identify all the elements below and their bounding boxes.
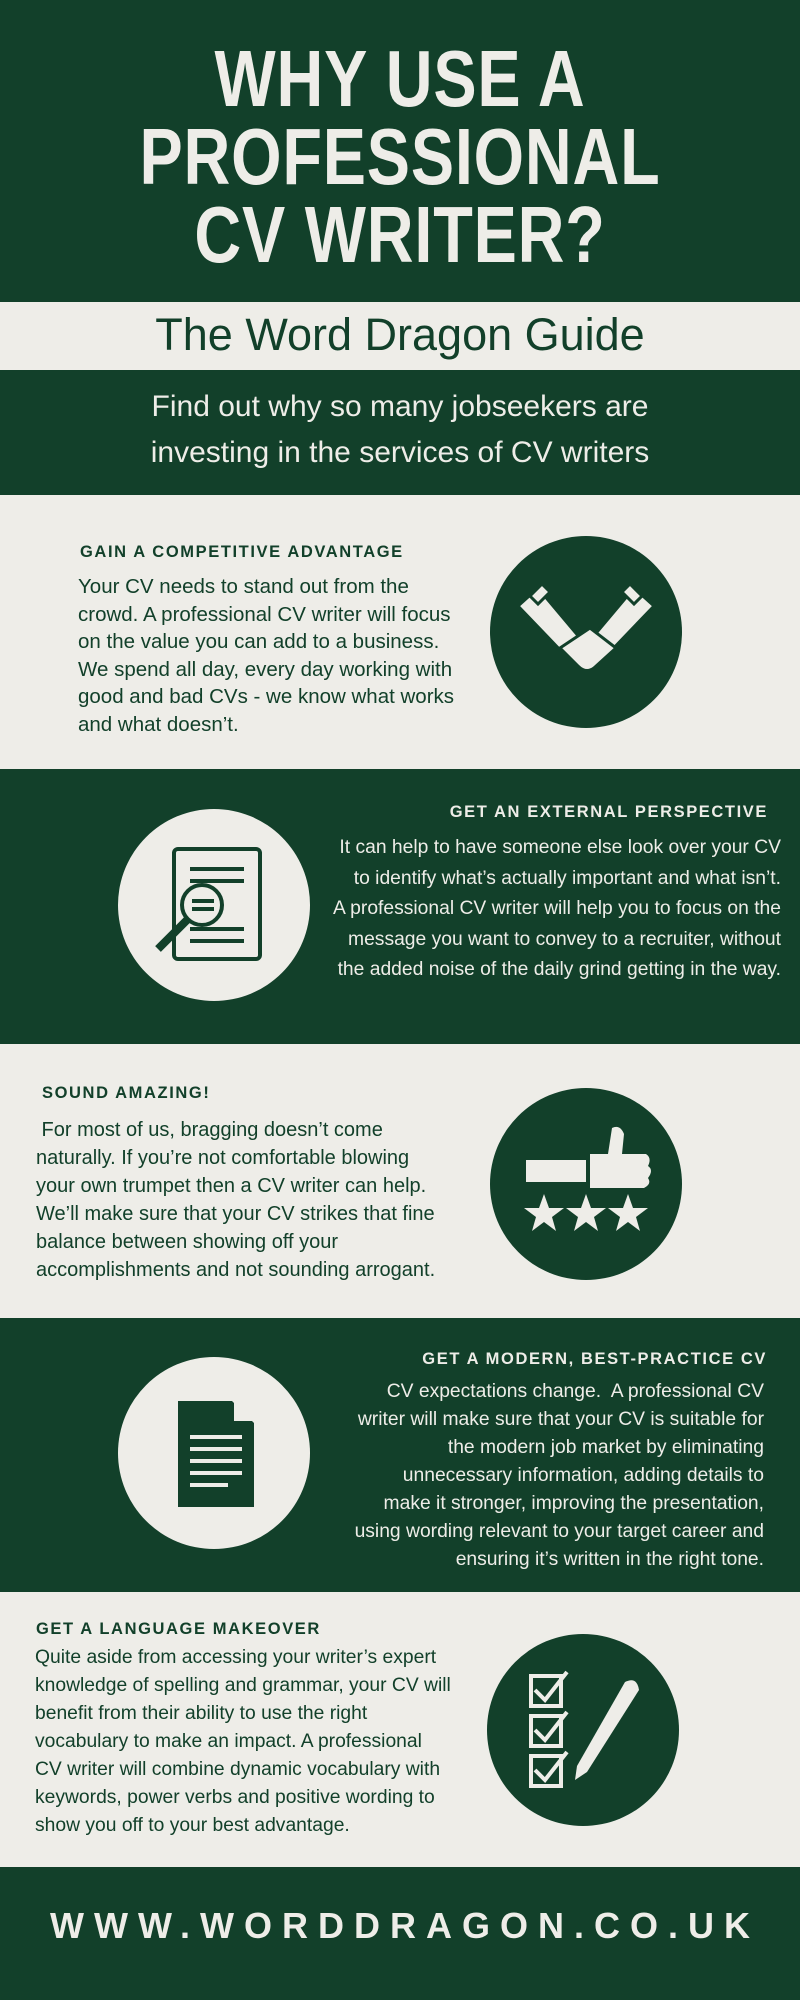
body text: and what doesn’t. — [78, 712, 239, 736]
body text — [333, 837, 781, 980]
heading: GAIN A COMPETITIVE ADVANTAGE — [80, 543, 404, 561]
panel: external perspective — [0, 769, 800, 1044]
heading: SOUND AMAZING! — [42, 1084, 210, 1102]
heading: GET AN EXTERNAL PERSPECTIVE — [450, 803, 768, 821]
body text: Your CV needs to stand out from the — [78, 575, 409, 598]
panel: competitive advantage — [0, 495, 800, 769]
body text: keywords, power verbs and positive wording to — [35, 1787, 435, 1808]
body text: unnecessary information, adding details to — [403, 1465, 764, 1486]
icon: document — [118, 1357, 310, 1549]
title: PROFESSIONAL — [140, 112, 660, 201]
body text: We’ll make sure that your CV strikes that fine — [36, 1203, 435, 1225]
intro band — [0, 370, 800, 495]
heading: GET A LANGUAGE MAKEOVER — [36, 1620, 321, 1638]
body text: It can help to have someone else look over your CV — [339, 837, 781, 858]
panel: language makeover — [0, 1592, 800, 1867]
intro text — [151, 390, 649, 469]
header band — [0, 0, 800, 302]
body text: vocabulary to make an impact. A professional — [35, 1731, 422, 1752]
icon: document magnifier — [118, 809, 310, 1001]
body text — [78, 575, 454, 736]
body text: the modern job market by eliminating — [448, 1437, 764, 1458]
icon: handshake — [490, 536, 682, 728]
body text — [35, 1647, 451, 1836]
body text: balance between showing off your — [36, 1231, 338, 1253]
body text: your own trumpet then a CV writer can help. — [36, 1175, 426, 1197]
intro text: Find out why so many jobseekers are — [152, 390, 648, 423]
title — [140, 34, 660, 279]
body text: to identify what’s actually important and what isn’t. — [354, 868, 781, 888]
body text: using wording relevant to your target career and — [355, 1521, 764, 1542]
body text: We spend all day, every day working with — [78, 658, 452, 680]
intro text: investing in the services of CV writers — [151, 436, 649, 469]
title: WHY USE A — [215, 34, 585, 123]
icon: thumbs up stars — [490, 1088, 682, 1280]
body text: A professional CV writer will help you to focus on the — [333, 898, 781, 919]
body text: writer will make sure that your CV is suitable for — [358, 1409, 764, 1430]
body text: Quite aside from accessing your writer’s expert — [35, 1647, 436, 1668]
body text: CV writer will combine dynamic vocabulary with — [35, 1759, 440, 1780]
body text: benefit from their ability to use the right — [35, 1703, 367, 1724]
body text: ensuring it’s written in the right tone. — [456, 1549, 764, 1570]
footer url: WWW.WORDDRAGON.CO.UK — [50, 1905, 760, 1946]
body text — [36, 1119, 435, 1281]
subtitle band — [0, 302, 800, 370]
panel: sound amazing — [0, 1044, 800, 1318]
body text: make it stronger, improving the presentation, — [384, 1493, 764, 1514]
icon: checklist pen — [487, 1634, 679, 1826]
body text: show you off to your best advantage. — [35, 1815, 350, 1836]
body text: accomplishments and not sounding arrogant. — [36, 1259, 435, 1281]
body text: For most of us, bragging doesn’t come — [42, 1119, 383, 1141]
body text: naturally. If you’re not comfortable blowing — [36, 1147, 409, 1169]
body text: CV expectations change. A professional CV — [387, 1381, 764, 1402]
body text: message you want to convey to a recruiter, without — [348, 928, 781, 950]
body text: the added noise of the daily grind getting in the way. — [338, 959, 781, 980]
subtitle: The Word Dragon Guide — [155, 309, 645, 360]
body text: crowd. A professional CV writer will focus — [78, 602, 451, 626]
panel: modern CV — [0, 1318, 800, 1592]
title: CV WRITER? — [194, 190, 606, 279]
footer band — [0, 1867, 800, 2000]
body text: good and bad CVs - we know what works — [78, 685, 454, 708]
body text: on the value you can add to a business. — [78, 630, 439, 653]
heading: GET A MODERN, BEST-PRACTICE CV — [422, 1350, 767, 1368]
body text — [355, 1381, 764, 1570]
body text: knowledge of spelling and grammar, your CV will — [35, 1675, 451, 1696]
